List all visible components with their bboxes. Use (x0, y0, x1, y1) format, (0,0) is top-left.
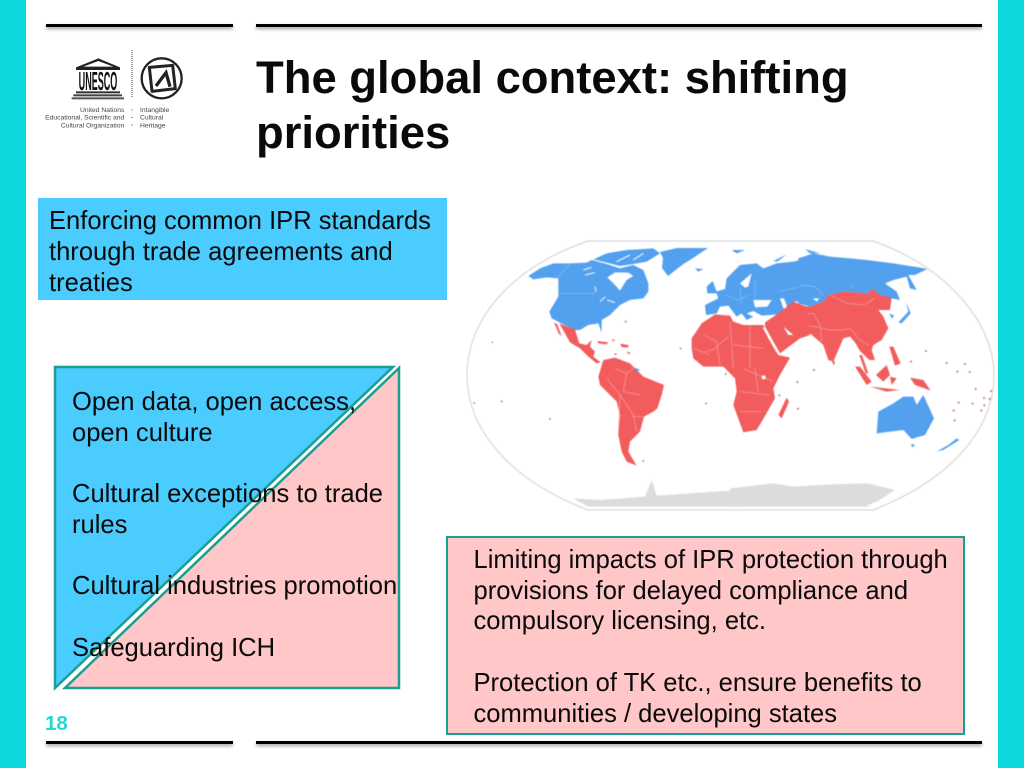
North America (528, 248, 660, 333)
panel text: Enforcing common IPR standards (49, 207, 431, 235)
panel text: Limiting impacts of IPR protection through (474, 546, 948, 574)
split box text (72, 388, 397, 662)
panel text: treaties (49, 269, 133, 297)
Greenland, Europe and western Russia (660, 248, 823, 320)
split box text: Cultural exceptions to trade (72, 480, 383, 508)
map outline (467, 241, 994, 510)
panel: limiting impacts of IPR protection (446, 536, 965, 735)
split box shapes (54, 365, 400, 691)
panel text: communities / developing states (474, 700, 837, 728)
title: priorities (256, 107, 450, 158)
page number: 18 (45, 712, 68, 734)
logo: UNESCO and Intangible Cultural Heritage: United Nations (80, 107, 125, 114)
logo: UNESCO and Intangible Cultural Heritage: UNESCO (79, 67, 117, 97)
logo: UNESCO and Intangible Cultural Heritage: Intangible (140, 107, 170, 114)
title (256, 52, 849, 158)
panel text: Protection of TK etc., ensure benefits to (474, 669, 922, 697)
panel: diagonal split box (54, 365, 400, 691)
split box text: Safeguarding ICH (72, 634, 275, 662)
Asia (793, 253, 931, 392)
panel: enforcing common IPR standards (38, 198, 447, 300)
panel text (474, 546, 948, 728)
logo: UNESCO and Intangible Cultural Heritage (45, 50, 183, 129)
Latin America (473, 321, 740, 507)
logo: UNESCO and Intangible Cultural Heritage: Heritage (140, 122, 166, 129)
panel text: through trade agreements and (49, 238, 393, 266)
top rule left (46, 24, 233, 27)
top rule right (256, 24, 982, 27)
split box text: Open data, open access, (72, 388, 356, 416)
title: The global context: shifting (256, 52, 849, 103)
bottom rule left (46, 741, 233, 744)
logo: UNESCO and Intangible Cultural Heritage: Cultural (140, 115, 164, 122)
split box text: Cultural industries promotion (72, 572, 397, 600)
logo: UNESCO and Intangible Cultural Heritage: Educational, Scientific and (45, 115, 125, 122)
Africa, Middle East and Oceania (692, 302, 992, 507)
panel text: provisions for delayed compliance and (474, 577, 908, 605)
right cyan band (998, 0, 1024, 768)
logo: UNESCO and Intangible Cultural Heritage: Cultural Organization (61, 122, 125, 129)
split box text: open culture (72, 419, 213, 447)
panel text: compulsory licensing, etc. (474, 607, 766, 635)
split box text: rules (72, 511, 127, 539)
left cyan band (0, 0, 26, 768)
panel text (49, 207, 431, 297)
bottom rule right (256, 741, 982, 744)
